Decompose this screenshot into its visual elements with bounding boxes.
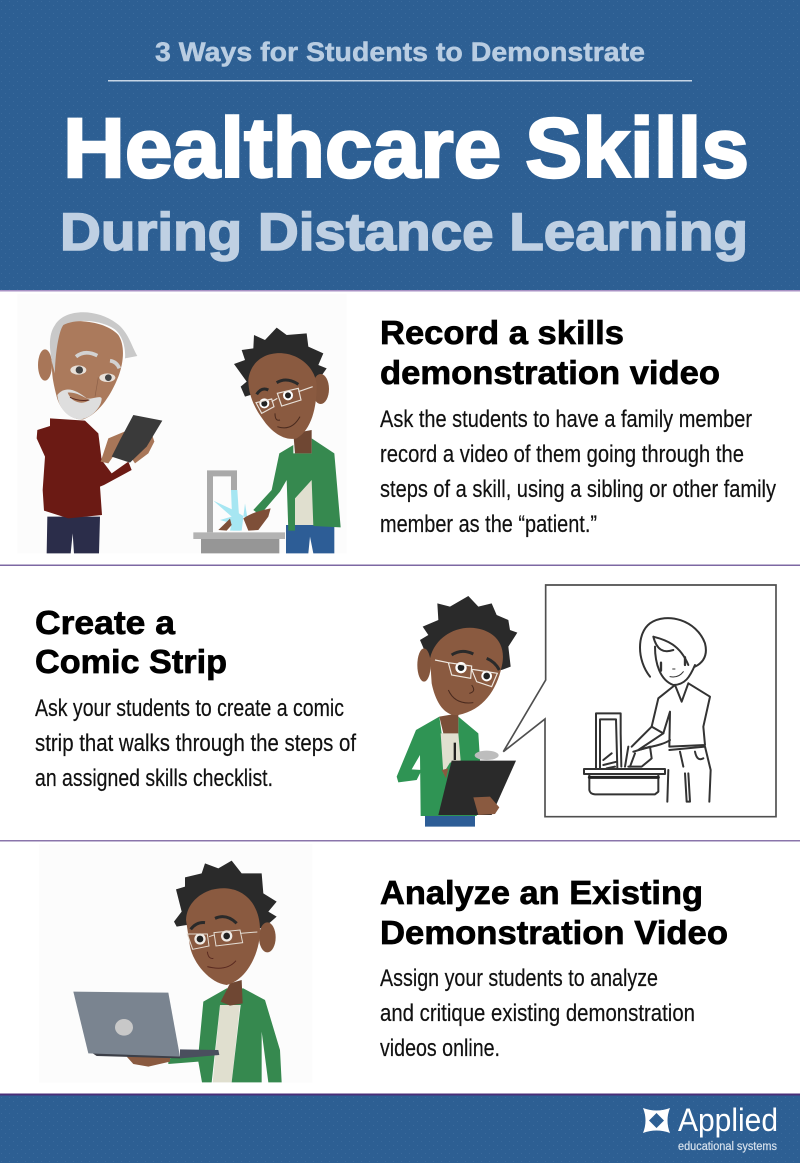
logo tagline: educational systems (678, 1141, 777, 1153)
header banner (0, 0, 800, 290)
section 3 text (380, 874, 728, 1062)
sink and running water (193, 473, 285, 553)
subtitle: 3 Ways for Students to Demonstrate (155, 37, 645, 67)
footer band (0, 1094, 800, 1163)
body: an assigned skills checklist. (35, 765, 273, 792)
speech bubble (503, 585, 776, 817)
body: Assign your students to analyze (380, 965, 658, 992)
section 1 text: demonstration video (380, 354, 720, 391)
heading: Record a skills (380, 314, 624, 351)
comic sketch: woman washing hands (584, 618, 711, 802)
older man (37, 312, 162, 553)
heading: Analyze an Existing (380, 874, 703, 911)
body (380, 406, 777, 538)
body: videos online. (380, 1035, 500, 1062)
section 2 text: Comic Strip (35, 643, 227, 680)
body: and critique existing demonstration (380, 1000, 695, 1027)
body (380, 965, 695, 1062)
section 3 text: Demonstration Video (380, 914, 728, 951)
laptop (73, 992, 219, 1067)
body: strip that walks through the steps of (35, 730, 356, 757)
body: Ask your students to create a comic (35, 695, 344, 722)
student (168, 861, 282, 1082)
heading: Create a (35, 604, 176, 641)
body: member as the “patient.” (380, 511, 597, 538)
illustration: student holding laptop (39, 844, 312, 1083)
icon: Applied logo mark (643, 1108, 670, 1133)
section 2 text (35, 604, 356, 792)
title second line: During Distance Learning (60, 203, 748, 262)
student washing hands (234, 328, 341, 553)
section 1 text (380, 314, 777, 538)
illustration: student with clipboard and comic speech bubble (397, 585, 776, 827)
body (35, 695, 356, 792)
logo wordmark: Applied (678, 1102, 778, 1138)
illustration: grandfather filming student washing hands (17, 294, 347, 553)
main title: Healthcare Skills (63, 101, 749, 195)
student with clipboard (397, 596, 517, 827)
